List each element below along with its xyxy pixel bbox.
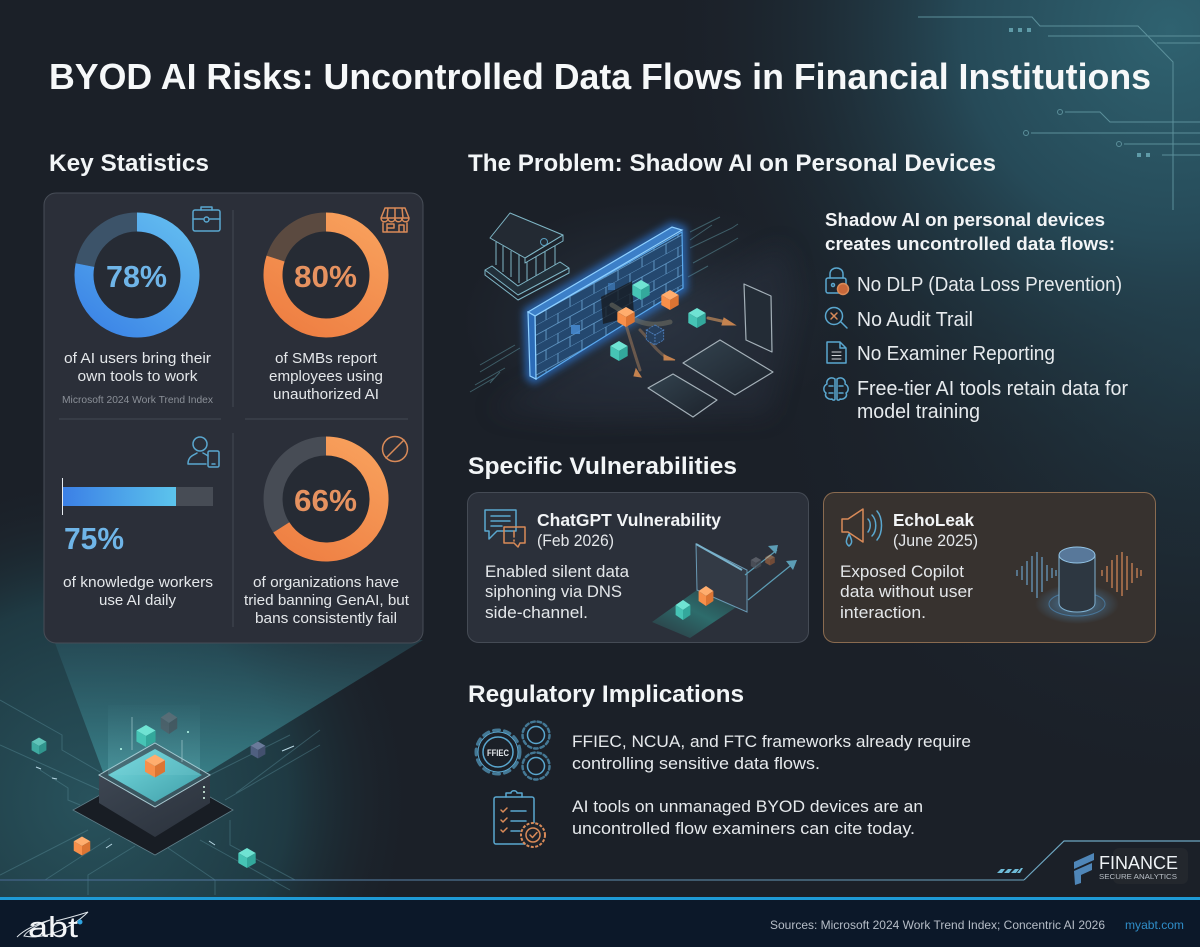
data cubes around hub [32, 712, 265, 868]
stat: 80 percent donut [269, 222, 383, 403]
heading: regulatory implications: Regulatory Implications [468, 681, 744, 708]
sources: Sources: Microsoft 2024 Work Trend Index; Concentric AI 2026 [770, 918, 1105, 932]
regulatory item: frameworks: controlling sensitive data flows. [572, 754, 820, 773]
stat: 66 percent donut: of organizations have [253, 574, 399, 591]
stat: 78 percent donut: own tools to work [78, 368, 198, 385]
icon: user with device [188, 437, 219, 467]
regulatory item: BYOD flow: uncontrolled flow examiners can cite today. [572, 819, 915, 838]
card: ChatGPT vulnerability: siphoning via DNS [485, 583, 622, 601]
risk: free-tier AI tools: model training [857, 401, 980, 423]
risk: free-tier AI tools: Free-tier AI tools retain data for [857, 378, 1128, 400]
icon: compliance gears [476, 722, 550, 780]
icon: bank building [485, 213, 569, 300]
stat: 78 percent donut [62, 222, 213, 406]
circuit lines: top right [918, 17, 1200, 210]
heading: key statistics: Key Statistics [49, 150, 209, 177]
footer bar [0, 897, 1200, 947]
icon: checklist with seal [494, 791, 545, 847]
text block: shadow AI intro: Shadow AI on personal devices [825, 209, 1105, 230]
data cubes [610, 280, 706, 361]
icon: lock [826, 268, 848, 294]
stat: 75 percent bar: use AI daily [99, 592, 176, 609]
heading: the problem: The Problem: Shadow AI on Personal Devices [468, 150, 996, 177]
stat: 66 percent donut: bans consistently fail [255, 610, 397, 627]
stat: 78 percent donut: 78% [106, 259, 167, 294]
panel: key statistics [44, 193, 423, 643]
icon: magnifier with x [826, 308, 847, 328]
card: EchoLeak: Exposed Copilot [840, 563, 964, 581]
regulatory item: frameworks [476, 722, 971, 780]
stat: 75 percent bar: of knowledge workers [63, 574, 213, 591]
title: BYOD AI Risks: Uncontrolled Data Flows in Financial Institutions [49, 56, 1151, 97]
regulatory item: BYOD flow: AI tools on unmanaged BYOD devices are an [572, 797, 923, 816]
card: ChatGPT vulnerability: Enabled silent data [485, 563, 630, 581]
regulatory item: frameworks: FFIEC, NCUA, and FTC frameworks already require [572, 732, 971, 751]
stat: 80 percent donut: unauthorized AI [273, 386, 379, 403]
card: EchoLeak: EchoLeak [893, 510, 974, 530]
stat: 78 percent donut: of AI users bring their [64, 350, 211, 367]
stat: 80 percent donut: employees using [269, 368, 383, 385]
illustration: DNS side channel tunnel [652, 544, 797, 638]
icon: chat alert [485, 510, 525, 547]
icon: speaker with drop [842, 509, 882, 546]
brick firewall [528, 227, 683, 379]
stat: 80 percent donut: of SMBs report [275, 350, 378, 367]
icon: prohibited [382, 436, 408, 462]
stat: 80 percent donut: 80% [294, 259, 357, 294]
icon: briefcase [193, 207, 220, 231]
card: ChatGPT vulnerability: (Feb 2026) [537, 532, 614, 550]
risk: no audit trail: No Audit Trail [857, 309, 973, 331]
illustration: smart speaker with sound waves [1017, 547, 1141, 624]
card: EchoLeak: interaction. [840, 604, 926, 622]
card: EchoLeak [824, 492, 1156, 642]
card: ChatGPT vulnerability [468, 492, 808, 642]
stat: 75 percent bar: 75% [64, 521, 124, 556]
risk: no DLP: No DLP (Data Loss Prevention) [857, 274, 1122, 296]
logo: abt: abt [28, 912, 78, 944]
regulatory item: BYOD flow [494, 791, 923, 847]
icon: document [827, 342, 846, 363]
gear label: FFIEC [487, 748, 509, 758]
illustration: data hub below statistics panel [0, 640, 1024, 895]
text block: shadow AI intro [825, 209, 1115, 254]
risk: free-tier AI tools [857, 378, 1128, 423]
website: myabt.com [1125, 918, 1184, 932]
risk: no examiner reporting: No Examiner Reporting [857, 343, 1055, 365]
icon: storefront [381, 208, 409, 232]
icon: brain [824, 378, 848, 400]
stat: 66 percent donut: tried banning GenAI, but [244, 592, 410, 609]
leak arrows [612, 305, 735, 377]
wall glow [528, 227, 683, 379]
stat: 66 percent donut [244, 446, 410, 627]
illustration: firewall with data leaking to personal devices [460, 200, 840, 440]
card: ChatGPT vulnerability: side-channel. [485, 604, 588, 622]
list: uncontrolled data flow risks [824, 268, 1128, 423]
stat: 75 percent bar [62, 478, 213, 609]
logo: finance secure analytics: FINANCE [1099, 853, 1178, 873]
stat: 78 percent donut: Microsoft 2024 Work Trend Index [62, 395, 213, 406]
stat: 66 percent donut: 66% [294, 483, 357, 518]
heading: specific vulnerabilities: Specific Vulnerabilities [468, 453, 737, 480]
card: EchoLeak: data without user [840, 583, 974, 601]
logo: abt [17, 912, 88, 944]
decorative footer bracket line [997, 841, 1200, 880]
text block: shadow AI intro: creates uncontrolled data flows: [825, 233, 1115, 254]
card: EchoLeak: (June 2025) [893, 532, 978, 550]
logo: finance secure analytics [1074, 848, 1188, 885]
card: ChatGPT vulnerability: ChatGPT Vulnerability [537, 510, 721, 530]
personal devices [648, 284, 773, 417]
logo: finance secure analytics: SECURE ANALYTICS [1099, 872, 1177, 881]
